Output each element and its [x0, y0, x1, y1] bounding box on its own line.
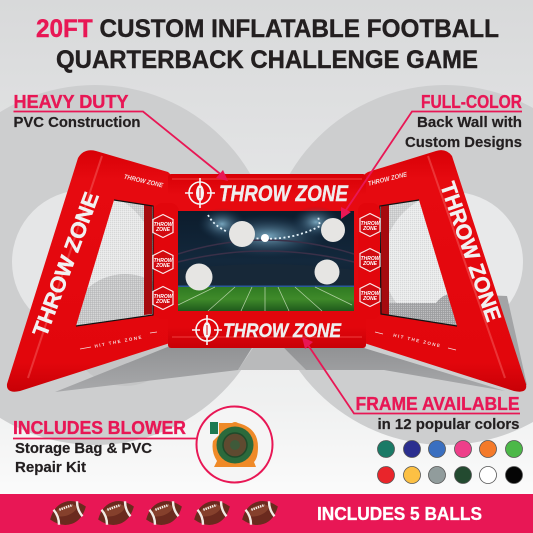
- bottom banner: [0, 494, 533, 533]
- top banner logo: [185, 178, 349, 208]
- callout: includes blower: INCLUDES BLOWER: [13, 417, 186, 438]
- inflatable game: [7, 150, 526, 392]
- title: 20FT CUSTOM INFLATABLE FOOTBALL: [36, 15, 499, 43]
- right wing: THROW ZONE: [435, 179, 505, 325]
- callout: frame available: FRAME AVAILABLE: [356, 393, 520, 414]
- callout: includes blower: [13, 417, 197, 476]
- center frame: [154, 174, 380, 348]
- left wing: THROW ZONE: [28, 189, 104, 340]
- callout: full-color: [341, 91, 522, 219]
- footballs: [46, 496, 282, 530]
- left wing: THROW ZONE: [123, 174, 164, 190]
- callout: includes blower: Storage Bag & PVC: [15, 441, 153, 457]
- right wing: [362, 150, 526, 392]
- color swatches: [378, 440, 522, 484]
- includes 5 balls text: INCLUDES 5 BALLS: [317, 504, 482, 524]
- left wing: HIT THE ZONE: [94, 334, 143, 349]
- callout: heavy duty: [14, 91, 228, 181]
- callout: frame available: in 12 popular colors: [378, 417, 520, 433]
- bottom banner logo: THROW ZONE: [223, 320, 342, 342]
- right wing: HIT THE ZONE: [393, 333, 442, 349]
- title: [36, 15, 499, 74]
- callout: heavy duty: PVC Construction: [14, 115, 140, 131]
- callout: full-color: Custom Designs: [405, 135, 522, 151]
- left wing: [7, 150, 172, 392]
- callout: frame available: [302, 337, 520, 433]
- right wing: THROW ZONE: [367, 171, 408, 188]
- top banner logo: THROW ZONE: [219, 181, 349, 206]
- callout: full-color: Back Wall with: [417, 115, 522, 131]
- title: QUARTERBACK CHALLENGE GAME: [56, 46, 478, 74]
- icon: blower: [196, 406, 272, 482]
- callout: heavy duty: HEAVY DUTY: [14, 91, 129, 112]
- football field back wall: [178, 206, 354, 311]
- bottom banner logo: [192, 315, 342, 345]
- callout: includes blower: Repair Kit: [15, 460, 86, 476]
- side hexagon logos: [153, 214, 381, 310]
